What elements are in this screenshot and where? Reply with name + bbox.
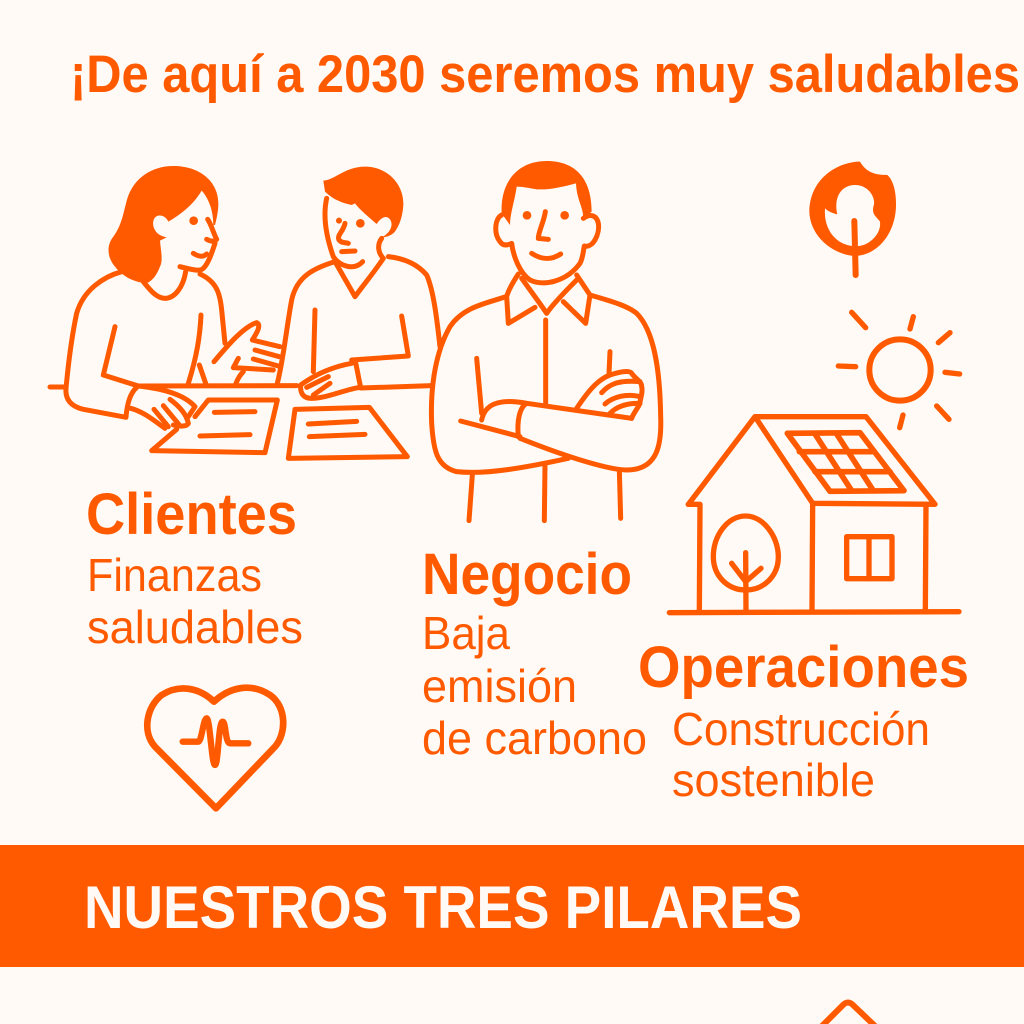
man collar — [507, 274, 590, 405]
pillar text: Operaciones — [638, 635, 969, 806]
pillar text: Operaciones: Construcción — [672, 703, 930, 755]
pillar text: Clientes — [86, 482, 303, 653]
illustration: man with crossed arms — [431, 161, 661, 521]
pillar text: Clientes: Finanzas — [87, 549, 262, 601]
man torso and arms — [431, 295, 661, 472]
icon: tree in a solid badge — [809, 162, 896, 275]
man legs — [469, 465, 621, 521]
banner: nuestros tres pilares — [0, 845, 1024, 967]
icon: cropped shape at bottom edge — [822, 1002, 875, 1024]
pillar text: Operaciones: sostenible — [672, 754, 875, 806]
ground line — [669, 612, 959, 613]
man head — [496, 211, 599, 283]
small tree — [713, 516, 778, 611]
pillar text: Negocio: Baja — [422, 607, 510, 659]
table edge — [50, 386, 432, 388]
pillar text: Clientes: Clientes — [86, 482, 297, 547]
icon: heart with pulse — [147, 688, 283, 808]
pillar text: Negocio: emisión — [422, 660, 577, 712]
solar panel — [787, 433, 904, 491]
document left — [152, 400, 277, 453]
pillar text: Negocio: de carbono — [422, 712, 647, 764]
illustration: two people at a table with documents — [50, 166, 440, 458]
house walls and window — [812, 503, 926, 612]
pillar text: Operaciones: Operaciones — [638, 635, 969, 700]
woman — [66, 166, 280, 428]
house roof — [688, 417, 935, 612]
icon: house with solar panels, sun and tree — [669, 312, 960, 613]
pillar text: Negocio: Negocio — [422, 542, 632, 607]
document right — [288, 407, 407, 458]
second person — [277, 167, 440, 398]
banner: nuestros tres pilares: NUESTROS TRES PILARES — [84, 874, 802, 941]
pillar text: Clientes: saludables — [87, 601, 303, 653]
sun — [838, 312, 960, 428]
pillar text: Negocio — [422, 542, 647, 764]
man hair — [502, 161, 592, 225]
